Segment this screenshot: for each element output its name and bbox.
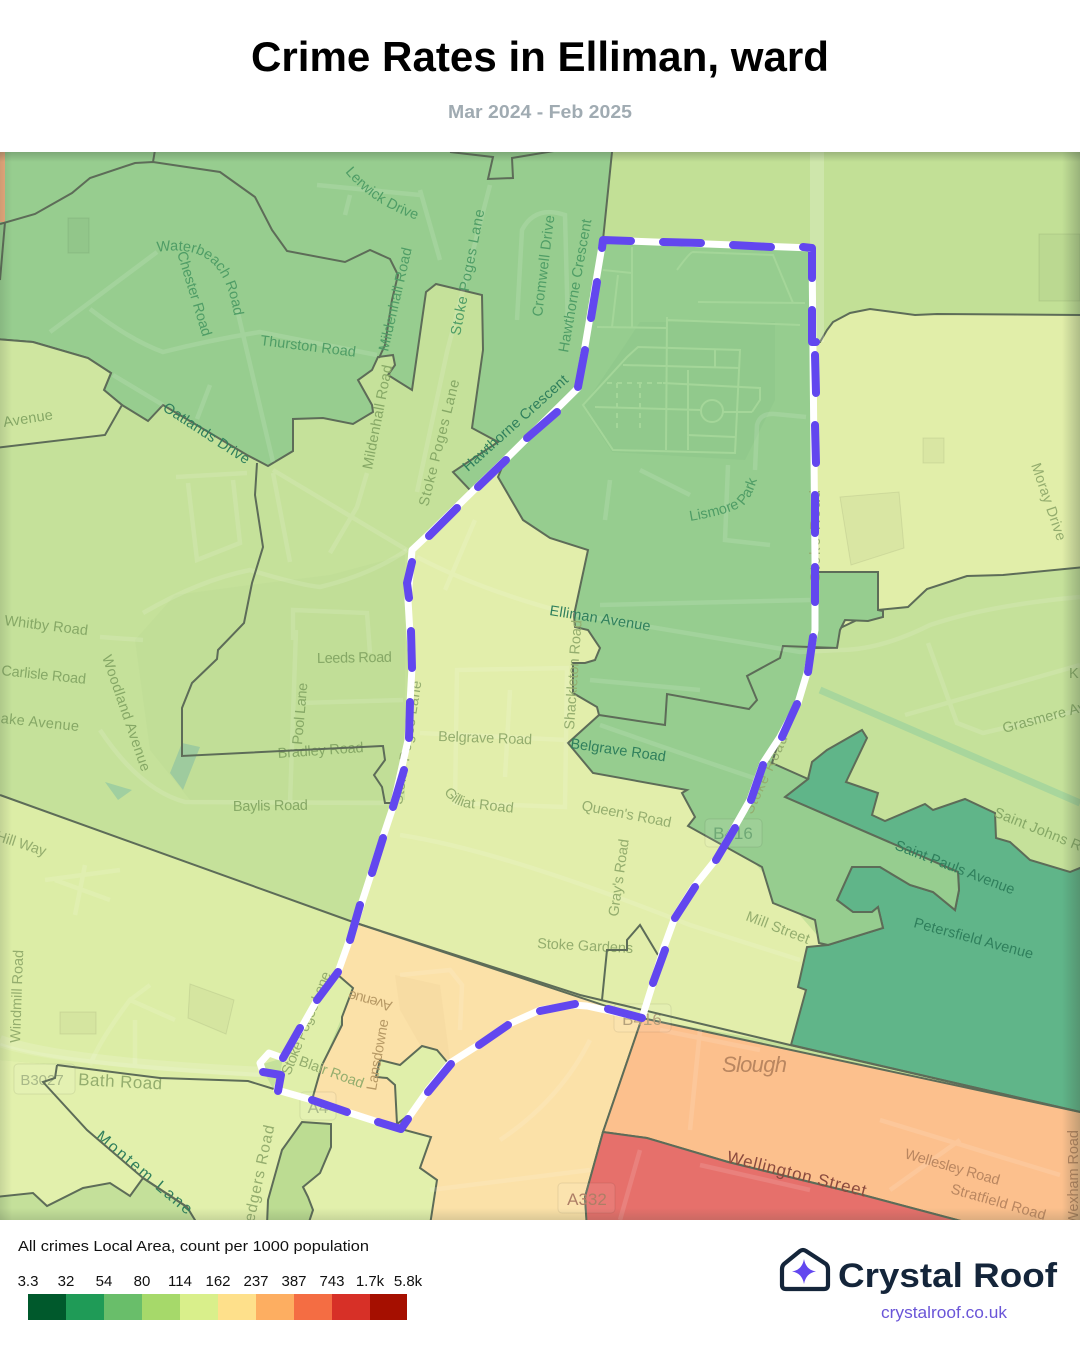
street labels: Wellington Street — [725, 1147, 869, 1201]
region: Avenue pocket — [0, 339, 122, 448]
region: south-west light area — [0, 795, 353, 1092]
road shields — [14, 819, 762, 1213]
street labels: Chester Road — [173, 249, 214, 338]
pond small — [105, 782, 132, 800]
road shields: B3027 — [20, 1072, 64, 1089]
street labels: Queen's Road — [580, 798, 673, 831]
region: east light area — [812, 309, 1080, 640]
legend scale labels: 3.3 — [18, 1273, 38, 1290]
street labels: Slough — [722, 1052, 787, 1077]
street labels: Belgrave Road — [438, 729, 532, 748]
legend — [18, 1239, 423, 1320]
region: north-west inner boundary — [0, 162, 398, 358]
boundary lines: rail line, Bath Road, Montem Lane, west pockets — [0, 222, 1080, 1207]
street labels: K — [1069, 666, 1079, 682]
region: north-east fields — [603, 152, 1080, 342]
region: south-west green — [0, 1178, 196, 1220]
street labels: Stoke Gardens — [537, 936, 633, 957]
cemetery paths — [583, 247, 805, 453]
region: ward inner boundary — [599, 646, 837, 725]
street labels: Whitby Road — [4, 613, 89, 639]
region: Bath Road south — [0, 1060, 437, 1220]
street labels: Lansdowne — [364, 1018, 392, 1092]
region: orange strip repaint — [0, 152, 5, 222]
street labels: Bradley Road — [277, 740, 364, 762]
street labels: Stoke Poges Lane — [416, 378, 463, 508]
street labels: Gilliat Road — [446, 788, 514, 813]
street labels: Oatlands Drive — [160, 400, 252, 468]
street labels: Hawthorne Crescent — [460, 372, 572, 475]
icon: purple star — [792, 1259, 816, 1284]
street labels: Woodland Avenue — [98, 653, 153, 774]
legend colour ramp — [28, 1294, 407, 1320]
street labels: Carlisle Road — [1, 663, 87, 688]
legend scale labels — [18, 1273, 423, 1290]
street labels: Cromwell Drive — [530, 214, 558, 317]
road shields: B416 — [622, 1010, 662, 1029]
region: Slough orange — [602, 1018, 1080, 1220]
road shields: B416 — [713, 824, 753, 843]
region: dark green Saint Pauls — [785, 730, 1080, 1113]
legend scale labels: 162 — [205, 1273, 231, 1290]
legend scale labels: 80 — [134, 1273, 150, 1290]
street labels: Bath Road — [78, 1070, 163, 1093]
street labels: Mildenhall Road — [376, 246, 416, 353]
street labels: Stoke Poges Lane — [279, 970, 335, 1077]
title: Crime Rates in Elliman, ward — [251, 33, 829, 80]
street labels: Hawthorne Crescent — [556, 218, 595, 354]
region: ward green with Belgrave band — [498, 240, 959, 945]
legend scale labels: 1.7k — [356, 1273, 385, 1290]
buildings — [60, 218, 1080, 1034]
region: darker orange tint — [395, 975, 450, 1060]
region: top notch boundary — [153, 150, 155, 162]
region: central Elliman light area — [353, 460, 830, 1045]
website url: crystalroof.co.uk — [881, 1304, 1008, 1322]
street labels: Ledgers Road — [239, 1124, 278, 1233]
street labels: Leeds Road — [317, 650, 392, 667]
region: wedge beside ward — [280, 978, 352, 1096]
ward boundary: white base line — [260, 240, 815, 1129]
icon: house outline — [782, 1250, 828, 1289]
street labels: Moray Drive — [1027, 461, 1069, 543]
street labels: Mildenhall Road — [360, 364, 396, 471]
street labels: Stratfield Road — [949, 1181, 1048, 1224]
logo: Crystal Roof — [782, 1250, 1058, 1322]
road: Bath Road band — [0, 1040, 265, 1072]
street labels: Pool Lane — [290, 682, 311, 745]
street labels: Windmill Road — [8, 950, 27, 1043]
road: north-south strip on the east — [810, 152, 824, 342]
pond — [170, 743, 200, 790]
ward boundary: purple dashes — [263, 240, 816, 1129]
park tint — [400, 782, 405, 800]
legend scale labels: 387 — [281, 1273, 307, 1290]
legend scale labels: 32 — [58, 1273, 74, 1290]
map edge vignette — [0, 152, 1080, 1220]
road shields: A4 — [308, 1098, 328, 1117]
street labels: Petersfield Avenue — [912, 915, 1035, 963]
street labels: Saint Pauls Avenue — [893, 838, 1017, 898]
region: green patch south — [267, 1122, 331, 1225]
street labels: Montem Lane — [92, 1128, 195, 1218]
street labels: Stoke Poges Lane — [448, 208, 488, 337]
region: top notch boundary east — [450, 150, 560, 179]
road shields: A332 — [567, 1190, 607, 1209]
ward tint cemetery — [583, 322, 775, 460]
street labels: Avenue — [346, 986, 394, 1014]
street labels: Lerwick Drive — [346, 166, 418, 219]
legend scale labels: 5.8k — [394, 1273, 423, 1290]
street labels: Elliman Avenue — [548, 603, 652, 635]
street labels: Stoke Poges Lane — [390, 680, 426, 806]
region: light lobe — [376, 1046, 448, 1124]
street labels: Mill Street — [744, 909, 812, 948]
legend scale labels: 237 — [243, 1273, 269, 1290]
street labels: Avenue — [2, 407, 54, 431]
legend scale labels: 114 — [168, 1273, 192, 1290]
street labels: Gray's Road — [606, 838, 633, 918]
street labels: Blair Road — [297, 1054, 366, 1092]
street labels: Stoke Road — [741, 733, 792, 817]
region: north-west green — [0, 140, 612, 490]
street labels: Belgrave Road — [569, 736, 667, 765]
region: orange Stoke Road area — [312, 922, 642, 1225]
road network — [0, 185, 1080, 1220]
street labels: Wellesley Road — [903, 1146, 1002, 1189]
street labels: Waterbeach Road — [156, 240, 244, 315]
legend scale labels: 743 — [319, 1273, 345, 1290]
legend scale labels: 54 — [96, 1273, 112, 1290]
region: orange strip at left edge — [0, 152, 5, 222]
subtitle: date range: Mar 2024 - Feb 2025 — [448, 102, 632, 122]
street labels: Thurston Road — [260, 333, 357, 361]
street labels: Stoke Road — [808, 490, 824, 582]
legend title: All crimes Local Area, count per 1000 population — [18, 1239, 369, 1255]
wordmark: Crystal Roof — [838, 1257, 1058, 1295]
street labels: Shackleton Road — [562, 619, 586, 730]
region: Wellington Street red — [584, 1130, 958, 1220]
street labels: Baylis Road — [233, 798, 308, 815]
railway — [820, 690, 1080, 803]
street labels: Lismore Park — [690, 478, 757, 521]
